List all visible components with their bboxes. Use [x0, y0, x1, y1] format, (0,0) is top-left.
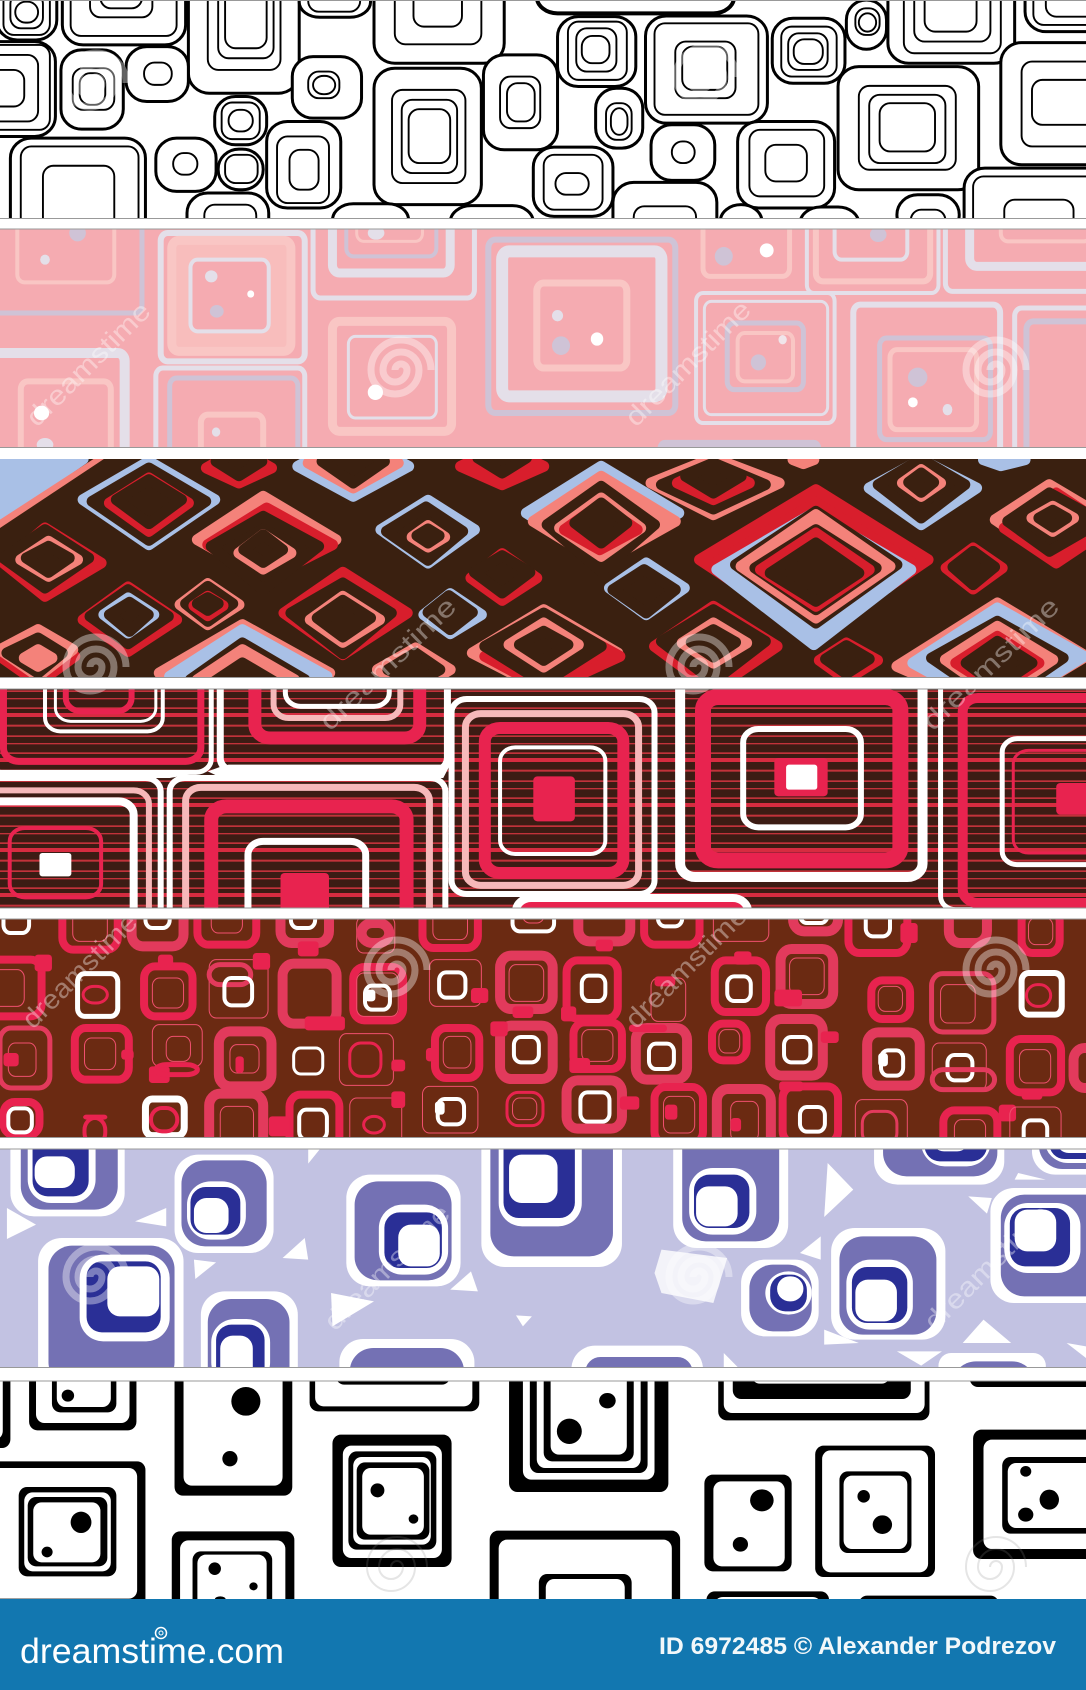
lower dice squares: [0, 1461, 999, 1631]
dreamstime watermark text: dreamstime: [318, 1198, 456, 1336]
upper dice squares: [0, 1356, 1086, 1496]
central diamonds: [471, 458, 1086, 645]
band 7: black and white dice squares: [0, 1382, 1086, 1599]
middle row of concentric rounded squares: [0, 42, 1086, 205]
dreamstime watermark text: dreamstime: [16, 907, 143, 1034]
dreamstime watermark text: dreamstime: [619, 294, 757, 432]
second row of small squares: [0, 949, 1062, 1032]
band 2: pink pastel squares: [0, 230, 1086, 447]
dreamstime watermark text: dreamstime: [918, 1198, 1056, 1336]
first row of small squares: [3, 903, 1060, 956]
purple squares upper row: [10, 1110, 1086, 1286]
logo: dreamstime.com: dreamstime.com: [20, 1632, 284, 1671]
band 6: lavender with purple and navy squares: [0, 1150, 1086, 1367]
band 4: striped red and white squares: [0, 690, 1086, 908]
fourth row of small squares: [3, 1080, 1061, 1150]
panel B top centre: [220, 666, 447, 771]
dreamstime watermark text: dreamstime: [20, 296, 157, 432]
corner stripe: [0, 459, 104, 528]
panel G bottom centre: [170, 778, 445, 941]
dreamstime watermark text: dreamstime: [916, 591, 1065, 736]
bottom row of concentric rounded squares: [10, 121, 1086, 255]
lower diamonds: [0, 455, 1086, 723]
watermark spirals: [66, 47, 1026, 1301]
faint grey spirals on the white band: [367, 1537, 1026, 1591]
band 3: dark brown with diamonds: [0, 459, 1086, 677]
small white star shapes: [7, 1149, 1086, 1367]
dreamstime watermark text: dreamstime: [619, 900, 753, 1034]
panel A top left: [0, 666, 211, 772]
band 1: black outline rounded squares on white: [0, 1, 1086, 218]
third row of small squares: [0, 1019, 1086, 1100]
panel C centre concentric square: [452, 699, 655, 894]
left diamonds: [3, 436, 544, 596]
purple squares lower row: [38, 1188, 1086, 1428]
image id and credit: ID 6972485 © Alexander Podrezov: [659, 1633, 1057, 1660]
white gaps between panels: [0, 765, 450, 778]
top row of concentric rounded squares: [0, 0, 1086, 123]
band 5: dark red with small pink squares: [0, 920, 1086, 1137]
footer bar: [0, 1599, 1086, 1690]
panel E right edge: [941, 666, 1086, 910]
panel D large concentric square: [516, 670, 923, 925]
pastel square frames: [0, 200, 1086, 511]
panel F bottom left: [0, 778, 161, 945]
dreamstime watermark text: dreamstime: [313, 591, 462, 736]
dreamstime watermark text: [16, 294, 1065, 1336]
middle dice squares: [332, 1430, 1086, 1577]
dots: [34, 225, 952, 451]
